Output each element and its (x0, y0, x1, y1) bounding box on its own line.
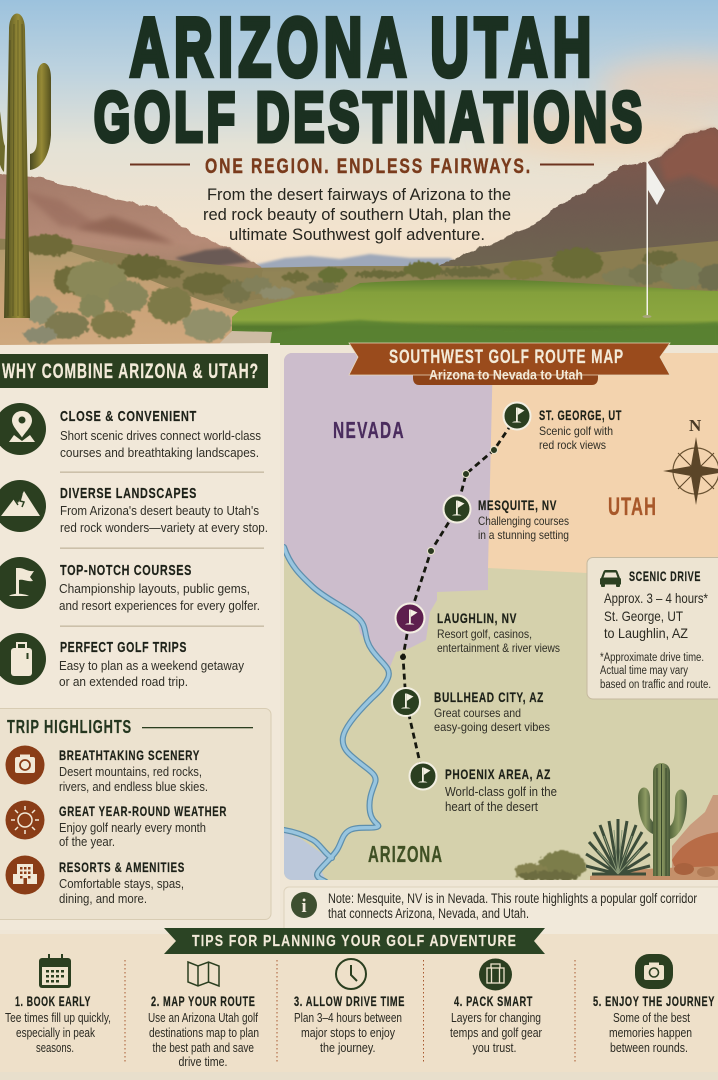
tips banner: TIPS FOR PLANNING YOUR GOLF ADVENTURE (192, 933, 517, 950)
intro paragraph (203, 186, 511, 244)
tip 2: map your route: the best path and save (152, 1041, 254, 1055)
heading bar: why combine (0, 354, 268, 388)
callout: scenic drive (587, 558, 718, 699)
intro paragraph: From the desert fairways of Arizona to the (207, 186, 511, 204)
state label: nevada: NEVADA (333, 417, 405, 443)
icon: map pin (0, 403, 46, 455)
tip 4: pack smart (450, 958, 542, 1055)
callout: scenic drive: to Laughlin, AZ (604, 625, 688, 641)
map title ribbon (349, 343, 670, 385)
stop: st george: ST. GEORGE, UT (539, 407, 622, 423)
saguaro cactus, left of hero (0, 14, 51, 318)
stop: st george: red rock views (539, 438, 606, 452)
tip 1: book early: seasons. (36, 1041, 74, 1055)
lake (284, 832, 330, 880)
tip 5: enjoy the journey: between rounds. (610, 1041, 688, 1055)
icon: mountain (0, 480, 46, 532)
stop: bullhead city: BULLHEAD CITY, AZ (434, 689, 544, 705)
tip 5: enjoy the journey (593, 954, 715, 1055)
stop: mesquite: MESQUITE, NV (478, 497, 557, 513)
benefit: top-notch courses: Championship layouts, public gems, (59, 581, 250, 596)
heading: trip highlights: TRIP HIGHLIGHTS (7, 717, 132, 737)
panel: southwest golf route map (284, 353, 718, 882)
compass rose (663, 416, 718, 505)
tip 4: pack smart: you trust. (472, 1041, 516, 1055)
highlight: breathtaking scenery (6, 746, 208, 794)
note box: that connects Arizona, Nevada, and Utah. (328, 906, 529, 921)
stop: phoenix area: PHOENIX AREA, AZ (445, 766, 551, 782)
tip 3: allow drive time: the journey. (320, 1041, 376, 1055)
benefit: top-notch courses: TOP-NOTCH COURSES (60, 562, 192, 579)
callout: scenic drive: St. George, UT (604, 608, 683, 624)
icon: hotel building (6, 856, 44, 894)
highlight: great weather: Enjoy golf nearly every month (59, 820, 206, 835)
stop: laughlin: LAUGHLIN, NV (437, 610, 517, 626)
panel: trip highlights (0, 708, 271, 920)
benefit: close and convenient: CLOSE & CONVENIENT (60, 408, 197, 425)
state label: utah: UTAH (608, 493, 657, 521)
stop: mesquite: Challenging courses (478, 514, 569, 528)
highlight: breathtaking scenery: rivers, and endless blue skies. (59, 779, 208, 794)
highlight: great weather: of the year. (59, 834, 115, 849)
stop: laughlin: Resort golf, casinos, (437, 627, 532, 641)
tip 1: book early: Tee times fill up quickly, (5, 1011, 111, 1025)
icon: car (600, 570, 621, 587)
stop: phoenix area: World-class golf in the (445, 784, 557, 799)
highlight: resorts and amenities: Comfortable stays, spas, (59, 876, 184, 891)
arizona region (284, 353, 718, 880)
icon: flag (0, 557, 46, 609)
panel: tips for planning (0, 928, 718, 1080)
tip 2: map your route: 2. MAP YOUR ROUTE (151, 994, 256, 1009)
tip 4: pack smart: temps and golf gear (450, 1026, 542, 1040)
benefit: perfect golf trips (0, 633, 244, 689)
tip 1: book early: 1. BOOK EARLY (15, 994, 91, 1009)
utah region (488, 353, 718, 576)
map title ribbon: Arizona to Nevada to Utah (429, 368, 583, 382)
tip 1: book early: especially in peak (16, 1026, 96, 1040)
stop: bullhead city: Great courses and (434, 706, 521, 720)
icon: sun (6, 800, 44, 840)
benefit: diverse landscapes: DIVERSE LANDSCAPES (60, 485, 197, 502)
icon: suitcase (0, 633, 46, 685)
golf flag (642, 162, 665, 318)
tip 2: map your route: Use an Arizona Utah golf (148, 1011, 258, 1025)
benefit: diverse landscapes (0, 480, 268, 535)
tips banner (164, 928, 545, 954)
benefit: diverse landscapes: From Arizona's desert beauty to Utah's (60, 503, 259, 518)
icon: clock (336, 959, 366, 989)
stop: laughlin: entertainment & river views (437, 641, 560, 655)
benefit: close and convenient: courses and breathtaking landscapes. (60, 445, 259, 460)
title (94, 0, 646, 156)
callout: scenic drive: Actual time may vary (600, 665, 688, 677)
tip 3: allow drive time: major stops to enjoy (301, 1026, 396, 1040)
hero scene: desert golf landscape (0, 0, 718, 350)
benefit: perfect golf trips: Easy to plan as a weekend getaway (59, 658, 244, 673)
tip 3: allow drive time: Plan 3–4 hours between (294, 1011, 402, 1025)
nevada region (284, 353, 493, 672)
desert plants and rocks (515, 763, 718, 881)
highlight: resorts and amenities (6, 856, 185, 906)
stop: laughlin (396, 604, 560, 655)
highlight: breathtaking scenery: BREATHTAKING SCENERY (59, 748, 200, 763)
benefit: close and convenient (0, 403, 261, 460)
benefit: top-notch courses: and resort experiences for every golfer. (59, 598, 260, 613)
icon: camera (635, 954, 673, 989)
compass rose: N (689, 416, 702, 435)
note box (284, 887, 718, 935)
stop: phoenix area: heart of the desert (445, 799, 538, 814)
tip 3: allow drive time: 3. ALLOW DRIVE TIME (294, 994, 405, 1009)
intro paragraph: red rock beauty of southern Utah, plan the (203, 206, 511, 224)
stop: mesquite (444, 496, 569, 542)
icon: folded map (188, 962, 219, 986)
highlight: resorts and amenities: dining, and more. (59, 891, 147, 906)
left column panel background (0, 343, 280, 930)
benefit: perfect golf trips: or an extended road trip. (59, 674, 188, 689)
tip 2: map your route: drive time. (178, 1055, 228, 1069)
dashed route line (400, 427, 510, 762)
tip 5: enjoy the journey: memories happen (609, 1026, 692, 1040)
highlight: great weather: GREAT YEAR-ROUND WEATHER (59, 804, 227, 819)
benefit: top-notch courses (0, 557, 260, 613)
benefit: close and convenient: Short scenic drives connect world-class (60, 428, 261, 443)
stop: phoenix area (410, 762, 557, 814)
highlight: resorts and amenities: RESORTS & AMENITIES (59, 860, 185, 875)
tip 1: book early (5, 954, 111, 1055)
benefit: diverse landscapes: red rock wonders—variety at every stop. (60, 520, 268, 535)
stop: bullhead city: easy-going desert vibes (434, 720, 550, 734)
tip 3: allow drive time (294, 959, 405, 1055)
heading bar: why combine: WHY COMBINE ARIZONA & UTAH? (2, 360, 259, 383)
stop: mesquite: in a stunning setting (478, 528, 569, 542)
tip 4: pack smart: Layers for changing (451, 1011, 541, 1025)
benefit: perfect golf trips: PERFECT GOLF TRIPS (60, 639, 187, 656)
state label: arizona: ARIZONA (368, 841, 443, 867)
river (284, 547, 389, 882)
stop: st george (504, 402, 622, 452)
tip 2: map your route (148, 962, 259, 1069)
map title ribbon: SOUTHWEST GOLF ROUTE MAP (389, 347, 624, 368)
tip 2: map your route: destinations map to plan (149, 1026, 259, 1040)
icon: camera (6, 746, 44, 784)
highlight: breathtaking scenery: Desert mountains, red rocks, (59, 764, 202, 779)
tagline: ONE REGION. ENDLESS FAIRWAYS. (205, 155, 532, 178)
intro paragraph: ultimate Southwest golf adventure. (229, 226, 485, 244)
tip 5: enjoy the journey: Some of the best (613, 1011, 690, 1025)
stop: st george: Scenic golf with (539, 424, 613, 438)
icon: info (291, 892, 317, 918)
icon: info: i (301, 896, 307, 917)
icon: bag (479, 958, 512, 990)
highlight: great weather (6, 800, 227, 849)
saguaro on map (638, 763, 687, 876)
icon: calendar (39, 954, 71, 988)
tip 4: pack smart: 4. PACK SMART (454, 994, 533, 1009)
stop: bullhead city (392, 688, 550, 734)
